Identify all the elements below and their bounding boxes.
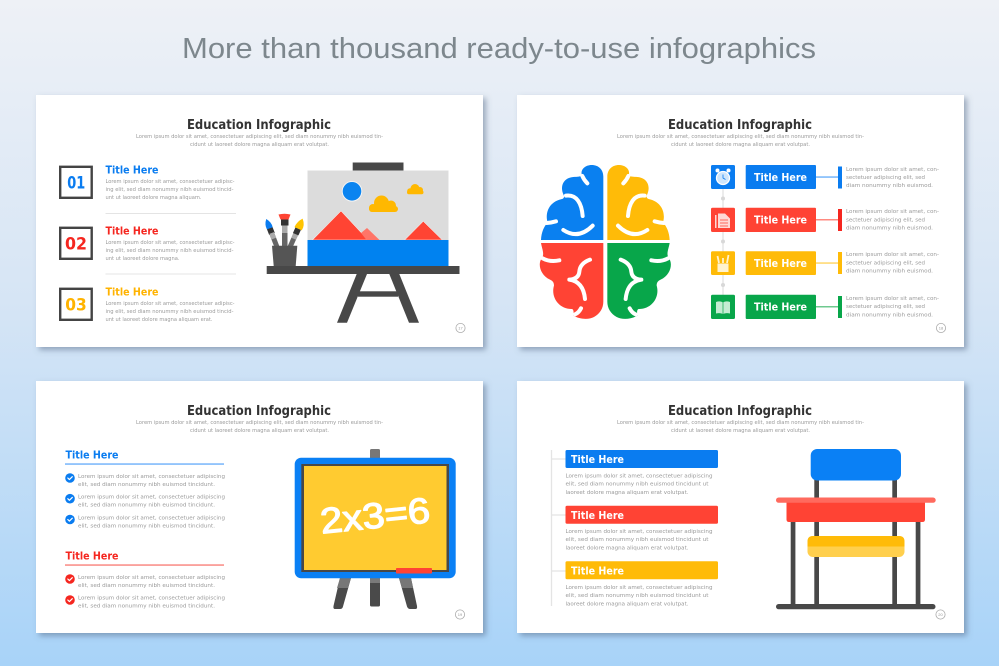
intro text: Lorem ipsum dolor sit amet, consectetuer adipiscing elit, sed diam nonummy nibh euismod tin- [136, 134, 383, 140]
row 2 title bar [746, 208, 816, 232]
yellow block text: elit, sed diam nonummy nibh euismod tincidunt ut [566, 593, 709, 599]
row 4 text [846, 296, 939, 318]
row 1 text: diam nonummy nibh euismod. [846, 183, 933, 189]
blue check item 1 [65, 473, 225, 488]
row 4 title bar: Title Here [754, 300, 807, 314]
red list title: Title Here [66, 550, 118, 562]
yellow title bar [566, 561, 718, 579]
page number [455, 610, 465, 619]
intro text: cidunt ut laoreet dolore magna aliquam erat volutpat. [190, 428, 329, 434]
row 1 title bar [746, 165, 816, 189]
item 1 text: Lorem ipsum dolor sit amet, consectetuer adipisc- [106, 179, 235, 185]
row 4 text: Lorem ipsum dolor sit amet, con- [846, 296, 939, 302]
yellow block text: laoreet dolore magna aliquam erat volutpat. [566, 601, 689, 607]
row 1 title bar: Title Here [754, 171, 807, 184]
icon: alarm clock [711, 165, 735, 189]
panel background [517, 381, 964, 633]
blue title bar: Title Here [571, 453, 624, 466]
row 2 text: diam nonummy nibh euismod. [846, 226, 933, 232]
brain: green quadrant [607, 243, 671, 319]
red block text: laoreet dolore magna aliquam erat volutpat. [566, 545, 689, 551]
number box 02: 02 [65, 234, 87, 254]
intro text: cidunt ut laoreet dolore magna aliquam erat volutpat. [190, 142, 329, 148]
row 4 text: diam nonummy nibh euismod. [846, 312, 933, 318]
row 2 connector [816, 209, 842, 231]
number box 02 [60, 228, 92, 259]
panel: numbered list with painting easel [36, 95, 483, 347]
yellow block text: Lorem ipsum dolor sit amet, consectetuer adipiscing [566, 585, 712, 591]
intro text [136, 134, 383, 148]
red block text: elit, sed diam nonummy nibh euismod tincidunt ut [566, 537, 709, 543]
page number [936, 323, 946, 333]
icon: document [711, 208, 735, 232]
item 3 text: unt ut laoreet dolore magna aliquam erat. [106, 317, 213, 323]
panel background [36, 95, 483, 347]
brain: blue quadrant [541, 165, 603, 240]
blue check item 2 [65, 494, 225, 509]
heading: Education Infographic [187, 404, 331, 419]
row 3 text: diam nonummy nibh euismod. [846, 269, 933, 275]
yellow block text [566, 585, 712, 607]
blue check item 3 [65, 515, 225, 530]
row 2 text: Lorem ipsum dolor sit amet, con- [846, 209, 939, 215]
row 3 title bar [746, 251, 816, 275]
row 1 connector [816, 166, 842, 188]
row 1 text: sectetuer adipiscing elit, sed [846, 175, 925, 181]
blue block text: Lorem ipsum dolor sit amet, consectetuer adipiscing [566, 474, 712, 480]
blue check item 1: Lorem ipsum dolor sit amet, consectetuer adipiscing [78, 474, 225, 480]
blue title bar [566, 450, 718, 468]
panel: title bars with school desk [517, 381, 964, 633]
number box 01: 01 [67, 174, 85, 192]
row 2 text: sectetuer adipiscing elit, sed [846, 217, 925, 223]
blue check item 2: Lorem ipsum dolor sit amet, consectetuer adipiscing [78, 494, 225, 500]
page number: 19 [458, 612, 463, 617]
intro text: cidunt ut laoreet dolore magna aliquam erat volutpat. [671, 142, 810, 148]
page number: 17 [458, 326, 463, 330]
intro text [617, 134, 864, 148]
red check item 1: Lorem ipsum dolor sit amet, consectetuer adipiscing [78, 575, 225, 581]
blue check item 3: Lorem ipsum dolor sit amet, consectetuer adipiscing [78, 515, 225, 521]
heading: Education Infographic [668, 404, 812, 419]
item 2 text: unt ut laoreet dolore magna. [106, 256, 180, 262]
number box 03: 03 [65, 296, 87, 314]
red block text [566, 529, 712, 551]
row 3 text: sectetuer adipiscing elit, sed [846, 260, 925, 266]
page number: 20 [938, 612, 943, 617]
item 2 text: ing elit, sed diam nonummy nibh euismod tincid- [106, 248, 234, 254]
item 1 title: Title Here [106, 164, 158, 176]
icon: pencil cup [711, 251, 735, 275]
yellow title bar: Title Here [571, 564, 624, 578]
blue block text [566, 474, 712, 496]
blue block text: elit, sed diam nonummy nibh euismod tincidunt ut [566, 482, 709, 488]
blue check item 1: elit, sed diam nonummy nibh euismod tincidunt. [78, 482, 215, 488]
item 1 text [106, 179, 235, 201]
red check item 2 [65, 595, 225, 610]
row 1 text: Lorem ipsum dolor sit amet, con- [846, 167, 939, 173]
intro text [617, 420, 864, 434]
chalk equation: 2x3=6 [318, 489, 432, 542]
main title: More than thousand ready-to-use infographics [182, 33, 816, 65]
page number [936, 610, 945, 619]
red check item 1: elit, sed diam nonummy nibh euismod tincidunt. [78, 583, 215, 589]
intro text: Lorem ipsum dolor sit amet, consectetuer adipiscing elit, sed diam nonummy nibh euismod tin- [136, 420, 383, 426]
blue check item 3: elit, sed diam nonummy nibh euismod tincidunt. [78, 524, 215, 530]
blue block text: laoreet dolore magna aliquam erat volutpat. [566, 490, 689, 496]
page number [456, 323, 465, 333]
item 1 text: unt ut laoreet dolore magna aliquam. [106, 195, 202, 201]
icon: small cloud [407, 184, 424, 194]
red title bar [566, 506, 718, 524]
intro text: Lorem ipsum dolor sit amet, consectetuer adipiscing elit, sed diam nonummy nibh euismod tin- [617, 420, 864, 426]
item 1 text: ing elit, sed diam nonummy nibh euismod tincid- [106, 187, 234, 193]
red check item 1 [65, 574, 225, 589]
illustration: painting easel [263, 162, 460, 323]
row 1 text [846, 167, 939, 189]
row 4 title bar [746, 295, 816, 319]
intro text: Lorem ipsum dolor sit amet, consectetuer adipiscing elit, sed diam nonummy nibh euismod tin- [617, 134, 864, 140]
intro text: cidunt ut laoreet dolore magna aliquam erat volutpat. [671, 428, 810, 434]
blue list title: Title Here [66, 448, 118, 462]
item 3 text [106, 301, 235, 323]
number box 01 [60, 167, 92, 198]
red check item 2: elit, sed diam nonummy nibh euismod tincidunt. [78, 604, 215, 610]
item 2 text [106, 240, 235, 262]
row 4 text: sectetuer adipiscing elit, sed [846, 304, 925, 310]
item 3 text: Lorem ipsum dolor sit amet, consectetuer adipisc- [106, 301, 235, 307]
row 3 text: Lorem ipsum dolor sit amet, con- [846, 252, 939, 258]
heading: Education Infographic [668, 118, 812, 133]
intro text [136, 420, 383, 434]
item 3 text: ing elit, sed diam nonummy nibh euismod tincid- [106, 309, 234, 315]
heading: Education Infographic [187, 118, 331, 133]
red check item 2: Lorem ipsum dolor sit amet, consectetuer adipiscing [78, 596, 225, 602]
panel background [36, 381, 483, 633]
timeline connector [721, 189, 725, 295]
row 2 title bar: Title Here [754, 214, 807, 226]
illustration: school desk and chair [776, 449, 936, 609]
row 2 text [846, 209, 939, 232]
illustration: four-colour brain [540, 165, 671, 319]
item 2 title: Title Here [106, 224, 158, 238]
illustration: chalkboard on easel [295, 449, 456, 609]
red title bar: Title Here [571, 509, 624, 522]
brain: yellow quadrant [607, 165, 670, 240]
panel: brain with four titled rows [517, 95, 964, 347]
bracket line [552, 450, 566, 606]
red block text: Lorem ipsum dolor sit amet, consectetuer adipiscing [566, 529, 712, 535]
row 3 text [846, 252, 939, 275]
panel background [517, 95, 964, 347]
brain: red quadrant [540, 243, 603, 319]
icon: large cloud [369, 196, 398, 212]
panel: checklists with chalkboard [36, 381, 483, 633]
item 2 text: Lorem ipsum dolor sit amet, consectetuer adipisc- [106, 240, 235, 246]
row 3 title bar: Title Here [754, 257, 807, 270]
item 3 title: Title Here [106, 286, 158, 298]
icon: open book [711, 295, 735, 319]
number box 03 [60, 289, 92, 320]
icon: brushes in cup [263, 214, 306, 266]
page number: 18 [939, 326, 944, 330]
blue check item 2: elit, sed diam nonummy nibh euismod tincidunt. [78, 503, 215, 509]
row 4 connector [816, 296, 842, 318]
row 3 connector [816, 252, 842, 274]
